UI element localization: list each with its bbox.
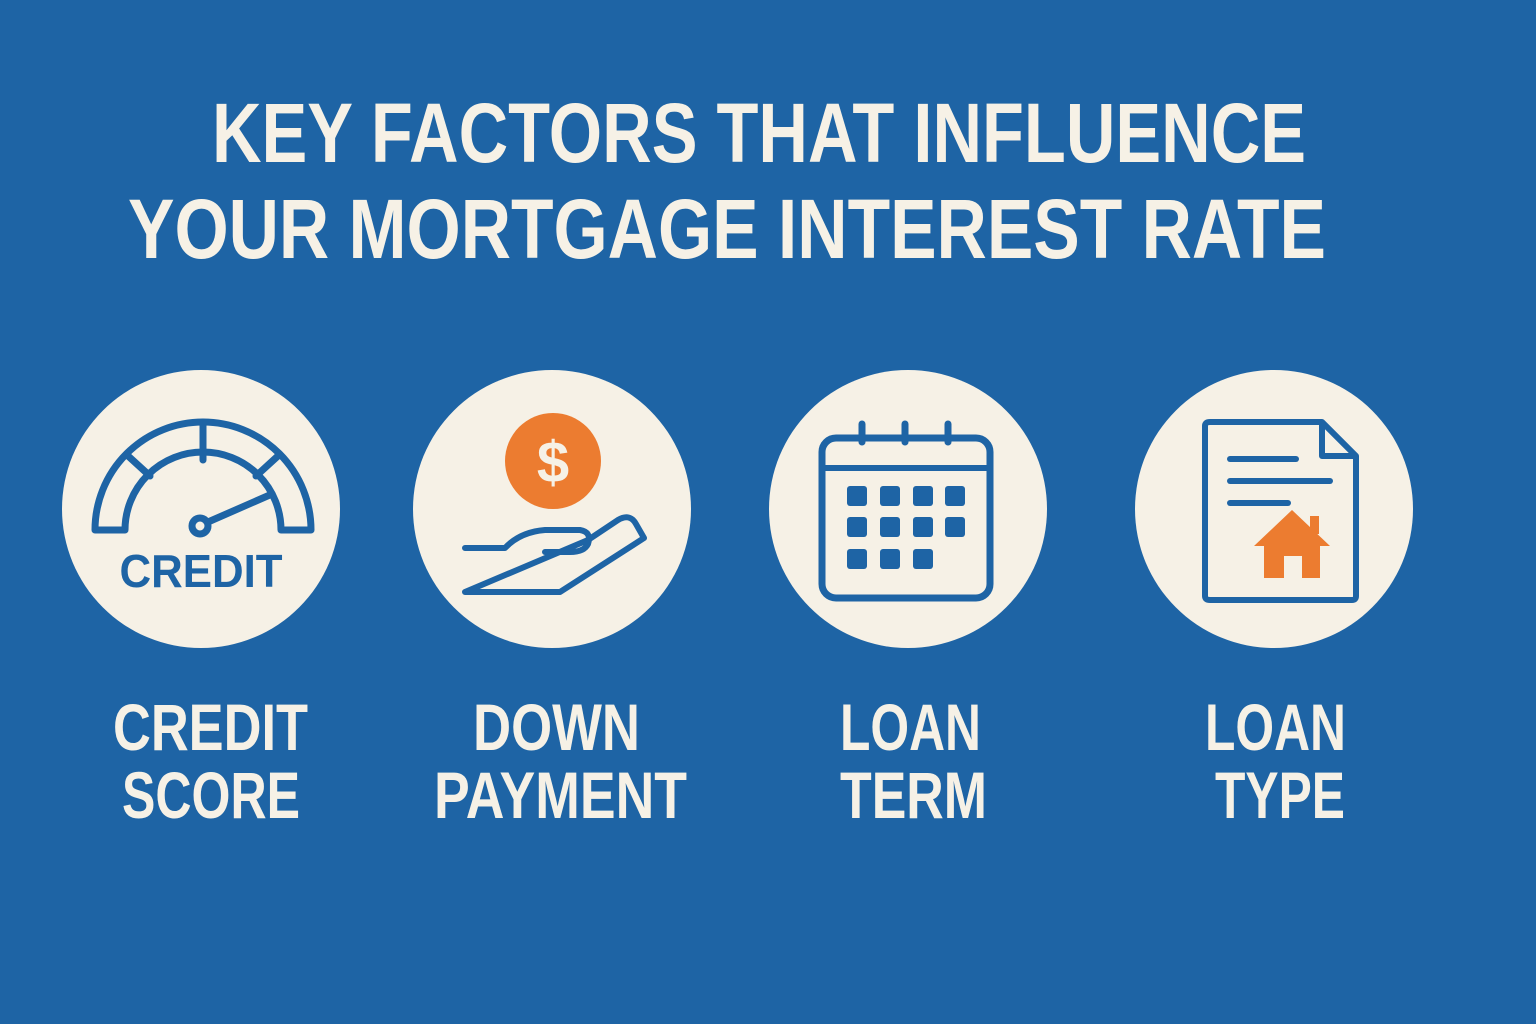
label: down payment: PAYMENT bbox=[434, 758, 687, 832]
label: loan type: LOAN bbox=[1205, 690, 1346, 764]
panel: down payment bbox=[413, 370, 691, 648]
label: loan term: LOAN bbox=[840, 690, 981, 764]
panel: loan term bbox=[769, 370, 1047, 648]
label: loan type: TYPE bbox=[1215, 758, 1345, 832]
icon: coin and hand: $ bbox=[537, 430, 569, 495]
label: credit score bbox=[113, 690, 308, 832]
label: credit score: CREDIT bbox=[113, 690, 308, 764]
label: loan term bbox=[840, 690, 987, 832]
title bbox=[128, 86, 1326, 276]
icon: calendar bbox=[822, 424, 990, 598]
panel: loan type bbox=[1135, 370, 1413, 648]
panel: credit score bbox=[62, 370, 340, 648]
label: loan term: TERM bbox=[840, 758, 987, 832]
icon: document with house bbox=[1205, 422, 1356, 600]
label: credit score: SCORE bbox=[122, 758, 300, 832]
label: down payment bbox=[434, 690, 687, 832]
icon: credit gauge bbox=[95, 422, 311, 597]
title: KEY FACTORS THAT INFLUENCE bbox=[212, 86, 1306, 180]
icon: credit gauge: CREDIT bbox=[120, 545, 282, 597]
labels bbox=[113, 690, 1346, 832]
label: loan type bbox=[1205, 690, 1346, 832]
icon: coin and hand bbox=[465, 413, 644, 592]
label: down payment: DOWN bbox=[473, 690, 640, 764]
title: YOUR MORTGAGE INTEREST RATE bbox=[128, 182, 1326, 276]
